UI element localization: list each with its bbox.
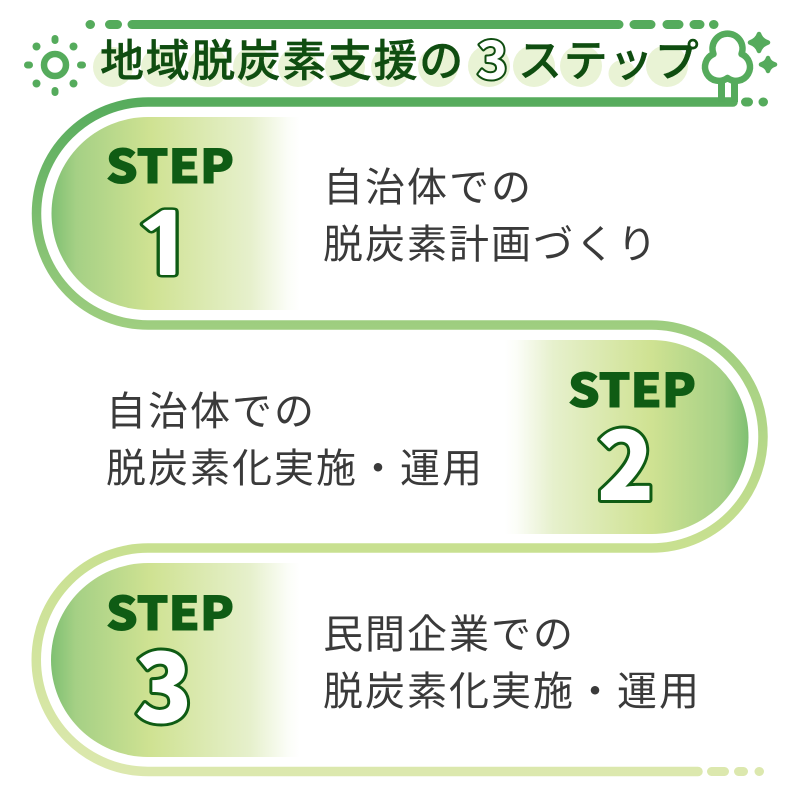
header top dashed line bbox=[90, 20, 714, 29]
step 2 badge bbox=[505, 340, 748, 534]
panel: step 2 bbox=[106, 340, 748, 534]
step 1 label: STEP bbox=[106, 131, 234, 197]
title: 地域脱炭素支援の bbox=[100, 25, 465, 89]
step 1 number: 1 bbox=[131, 204, 200, 288]
icon: sparkles bbox=[750, 34, 775, 71]
title: 3 bbox=[477, 19, 508, 94]
serpentine ribbon line bbox=[36, 102, 764, 772]
step 2 text: 脱炭素化実施・運用 bbox=[106, 447, 484, 491]
step 3 label: STEP bbox=[106, 578, 234, 644]
step 1 text: 脱炭素計画づくり bbox=[323, 223, 659, 267]
icon: sun bbox=[24, 35, 86, 96]
step 1 text: 自治体での bbox=[323, 166, 533, 210]
step 2 label: STEP bbox=[568, 355, 696, 421]
step 3 badge bbox=[51, 563, 300, 757]
step 3 text: 脱炭素化実施・運用 bbox=[323, 670, 701, 714]
title: ステップ bbox=[518, 25, 700, 89]
step 2 number: 2 bbox=[597, 392, 654, 528]
step 3 text: 民間企業での bbox=[323, 613, 575, 657]
icon: tree bbox=[705, 34, 750, 102]
panel: step 1 bbox=[52, 117, 659, 310]
title background circles bbox=[93, 45, 688, 87]
step 2 text: 自治体での bbox=[106, 390, 316, 434]
step 3 number: 3 bbox=[135, 614, 192, 750]
panel: step 3 bbox=[51, 563, 701, 757]
title bbox=[100, 19, 700, 94]
step 1 badge bbox=[52, 117, 300, 310]
